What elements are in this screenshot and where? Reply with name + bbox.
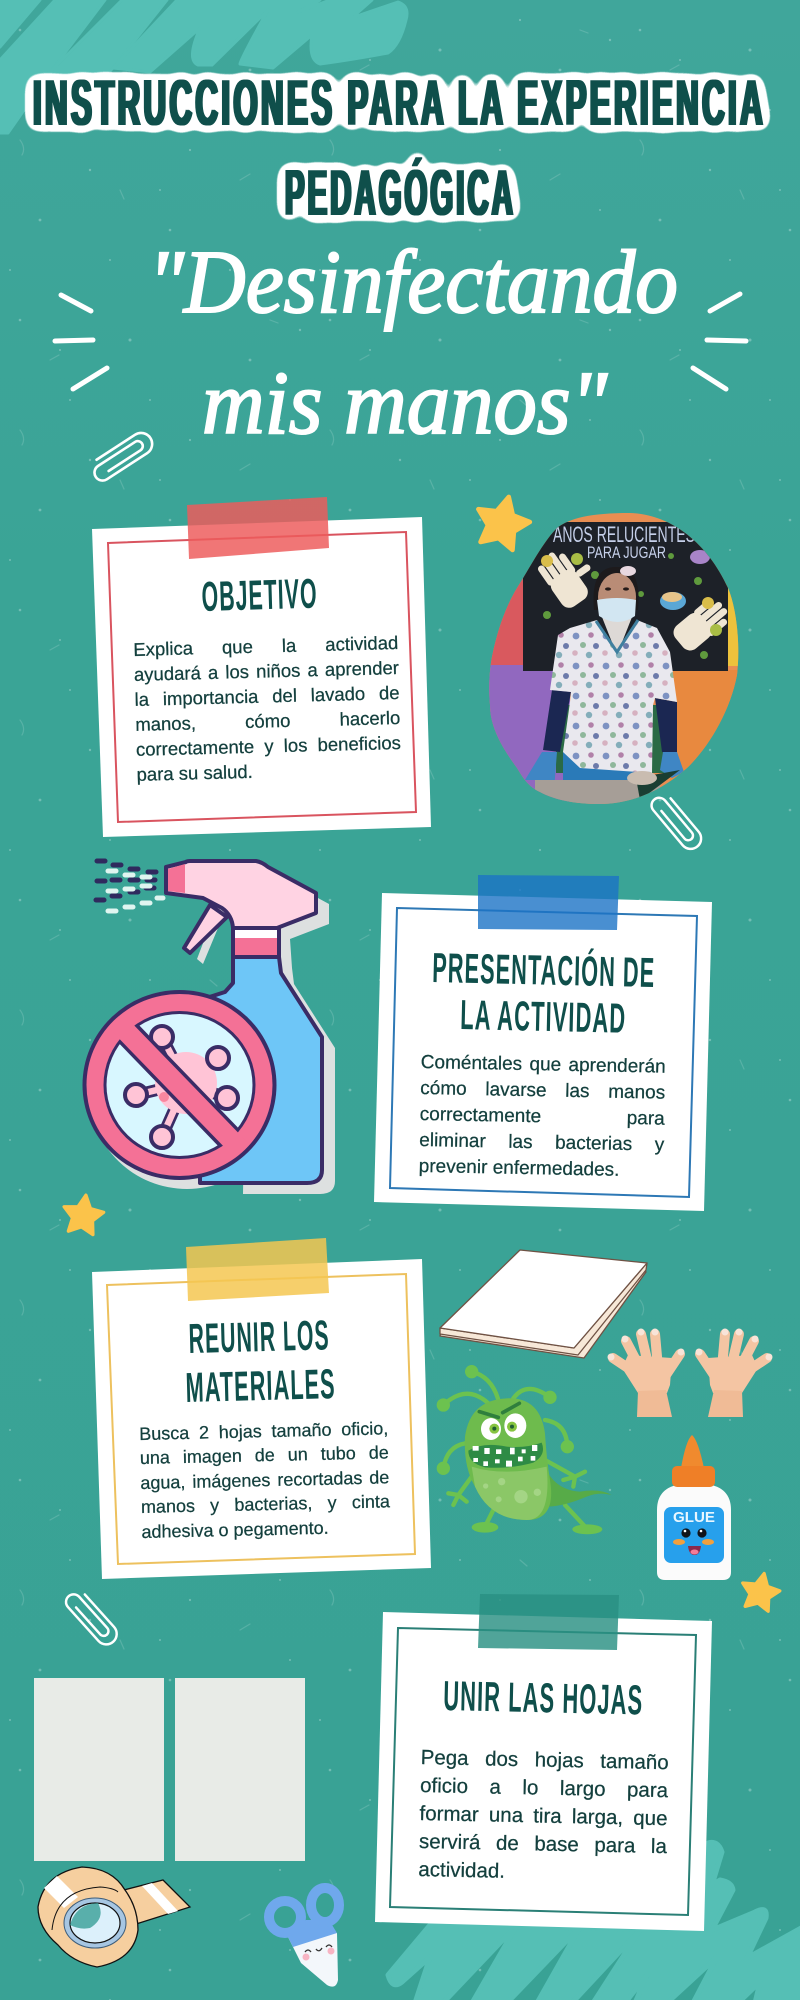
photo detail: table <box>535 780 660 804</box>
scissors face <box>302 1945 334 1960</box>
title: PEDAGÓGICA <box>285 156 516 229</box>
icon: yellow star beside photo <box>471 490 535 552</box>
body text: una imagen de un tubo de <box>140 1443 389 1468</box>
photo: teacher in front of hand-washing board <box>485 510 745 810</box>
glue nozzle <box>681 1435 704 1468</box>
brush stroke: bottom-right decoration <box>388 1842 800 2000</box>
body text <box>419 1052 666 1181</box>
icon: yellow star right <box>738 1569 783 1613</box>
glue body <box>657 1484 731 1580</box>
scissors handle body <box>288 1920 337 1947</box>
photo detail: hair <box>593 567 639 610</box>
photo detail: black board <box>523 522 734 671</box>
spray head <box>166 861 316 928</box>
body text: la importancia del lavado de <box>134 682 400 710</box>
photo detail: sleeves <box>543 690 677 752</box>
inner border <box>390 908 697 1197</box>
paper <box>92 517 431 837</box>
icon: spray bottle with prohibited virus <box>82 861 335 1194</box>
body text: manos, cómo hacerlo <box>135 707 400 735</box>
photo detail: face <box>598 573 636 602</box>
photo detail: neck <box>602 618 632 650</box>
panel: presentación de la actividad <box>374 875 712 1211</box>
body text: servirá de base para la <box>419 1830 667 1858</box>
inner border <box>390 1628 696 1915</box>
photo detail: dark cloth <box>637 770 680 797</box>
body text: correctamente y los beneficios <box>136 732 401 760</box>
icon: right burst rays <box>693 294 746 389</box>
tape <box>478 1594 619 1650</box>
icon: stack of paper <box>440 1250 647 1358</box>
nozzle <box>168 864 185 893</box>
body text: oficio a lo largo para <box>420 1774 668 1802</box>
scissors blades <box>288 1933 338 1987</box>
heading: REUNIR LOS <box>188 1311 330 1362</box>
photo detail: eyes <box>605 587 629 591</box>
panel: reunir los materiales <box>92 1238 431 1579</box>
body text: manos y bacterias, y cinta <box>141 1492 390 1517</box>
right hand <box>696 1328 772 1417</box>
tape <box>187 497 329 559</box>
body text: Explica que la actividad <box>133 632 399 660</box>
icon: yellow star left <box>61 1192 106 1236</box>
glue text: GLUE <box>673 1509 715 1526</box>
photo detail: collar <box>596 620 638 652</box>
glue label <box>664 1507 724 1563</box>
heading: OBJETIVO <box>201 570 318 620</box>
icon: paperclip lower-left <box>63 1587 121 1649</box>
blank sheet left <box>34 1678 164 1861</box>
body text: formar una tira larga, que <box>419 1802 668 1830</box>
body text <box>418 1746 669 1883</box>
paper <box>92 1259 431 1579</box>
bottle neck <box>233 926 279 957</box>
photo detail: scrub top <box>550 620 677 773</box>
tape <box>186 1238 329 1301</box>
tape <box>478 875 619 930</box>
tape core <box>64 1898 126 1948</box>
photo detail: gloves <box>525 752 684 780</box>
brush stroke: top-left decoration <box>0 0 407 133</box>
body text: actividad. <box>418 1858 505 1883</box>
inner border <box>107 1274 415 1564</box>
blank sheet right <box>175 1678 305 1861</box>
paper <box>375 1612 712 1931</box>
icon: glue bottle <box>657 1435 731 1580</box>
body text: prevenir enfermedades. <box>419 1156 620 1181</box>
body text <box>139 1418 390 1542</box>
glue face <box>673 1528 714 1555</box>
glue cap <box>672 1466 715 1487</box>
virus <box>125 1026 238 1148</box>
body text: Pega dos hojas tamaño <box>420 1746 669 1774</box>
left hand <box>608 1328 684 1417</box>
prohibition ring <box>82 990 276 1180</box>
photo detail: cap <box>620 566 636 576</box>
spray mist dots <box>96 861 163 911</box>
icon: paperclip under photo <box>648 791 705 853</box>
body text: agua, imágenes recortadas de <box>140 1467 390 1493</box>
body text: Coméntales que aprenderán <box>421 1052 666 1078</box>
body text: ayudará a los niños a aprender <box>134 657 399 685</box>
trigger <box>184 905 227 953</box>
photo detail: black board: ANOS RELUCIENTES <box>553 522 695 547</box>
icon: pair of hands <box>608 1328 772 1417</box>
heading line 2: LA ACTIVIDAD <box>460 991 627 1042</box>
icon: green bacteria <box>437 1365 612 1534</box>
spray bottle shadow <box>90 873 335 1194</box>
body text: Busca 2 hojas tamaño oficio, <box>139 1418 388 1444</box>
photo detail: rag <box>627 771 657 785</box>
scissors rings <box>269 1888 339 1933</box>
photo detail: black board: PARA JUGAR <box>587 543 666 562</box>
body text: para su salud. <box>136 761 253 785</box>
body text: eliminar las bacterias y <box>419 1130 664 1156</box>
icon: kawaii scissors <box>269 1888 339 1987</box>
tape body <box>38 1867 138 1967</box>
subtitle: Desinfectando mis manos: mis manos" <box>202 354 608 453</box>
heading line 2: MATERIALES <box>185 1360 336 1411</box>
subtitle: Desinfectando mis manos: "Desinfectando <box>148 233 678 332</box>
inner border <box>108 532 416 822</box>
photo detail: mask <box>597 598 636 622</box>
icon: paperclip top-left <box>88 429 156 484</box>
title <box>33 66 766 229</box>
paper <box>374 893 712 1211</box>
icon: tape roll <box>38 1867 190 1967</box>
body text: adhesiva o pegamento. <box>141 1517 329 1542</box>
panel: objetivo <box>92 497 431 837</box>
subtitle: Desinfectando mis manos <box>148 233 678 453</box>
prohibition slash <box>120 1026 238 1146</box>
icon: left burst rays <box>55 295 107 389</box>
body text: correctamente para <box>420 1104 665 1130</box>
photo detail: pants <box>563 752 636 780</box>
panel: unir las hojas <box>375 1594 712 1931</box>
bottle body <box>200 957 322 1183</box>
photo detail: green chair <box>556 705 674 773</box>
tape tail <box>112 1880 190 1925</box>
body text: cómo lavarse las manos <box>420 1078 665 1104</box>
body text <box>133 632 401 785</box>
